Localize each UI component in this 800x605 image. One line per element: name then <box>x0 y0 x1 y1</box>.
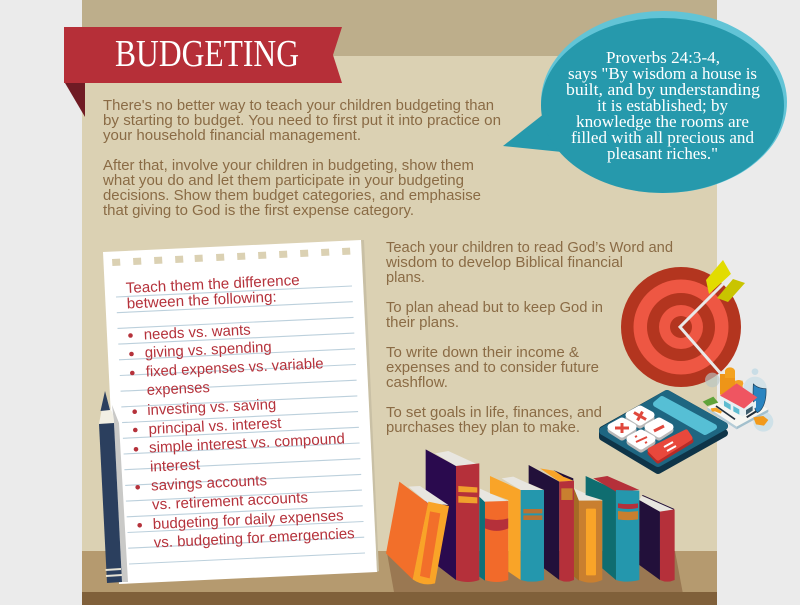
title ribbon <box>64 27 342 117</box>
right column text: To set goals in life, finances, and <box>386 405 602 421</box>
list text: between the following: <box>126 289 277 312</box>
list text: expenses <box>146 379 210 399</box>
right column text: purchases they plan to make. <box>386 420 580 436</box>
shelf shadow <box>387 551 683 592</box>
intro text: After that, involve your children in budgeting, show them <box>103 158 474 174</box>
quote text: built, and by understanding <box>566 80 760 99</box>
quote text: knowledge the rooms are <box>576 112 749 131</box>
notepaper <box>103 240 379 584</box>
quote text: Proverbs 24:3-4, <box>606 48 720 67</box>
icon: target with arrow <box>621 260 745 387</box>
list text: principal vs. interest <box>148 415 283 438</box>
right column text <box>385 240 673 436</box>
quote text: pleasant riches." <box>607 144 718 163</box>
quote text: filled with all precious and <box>571 128 755 147</box>
list text: Teach them the difference <box>125 272 300 297</box>
list text: budgeting for daily expenses <box>152 507 344 533</box>
book: teal <box>586 476 639 582</box>
display screen <box>656 399 714 432</box>
title: BUDGETING <box>115 33 299 75</box>
paper holes <box>112 248 350 266</box>
intro text: by starting to budget. You need to first put it into practice on <box>103 113 501 129</box>
book: purple and red <box>426 449 479 582</box>
list text: investing vs. saving <box>147 396 277 419</box>
list text <box>125 272 355 551</box>
quote text: says "By wisdom a house is <box>568 64 757 83</box>
right column text: plans. <box>386 270 425 286</box>
book: orange leaning <box>386 482 449 584</box>
list text: needs vs. wants <box>143 322 251 343</box>
intro text: your household financial management. <box>103 128 361 144</box>
list bullets <box>128 333 142 528</box>
right column text: wisdom to develop Biblical financial <box>385 255 623 271</box>
ruled lines <box>116 286 365 564</box>
list text: vs. retirement accounts <box>152 489 308 513</box>
right column text: expenses and to consider future <box>386 360 599 376</box>
books <box>386 449 683 592</box>
book: small dark and red <box>639 495 675 582</box>
right column text: Teach your children to read God’s Word and <box>386 240 673 256</box>
intro text <box>102 98 501 219</box>
list text: interest <box>150 456 201 475</box>
speech bubble: Proverbs quote <box>503 11 787 193</box>
right column text: To plan ahead but to keep God in <box>386 300 603 316</box>
intro text: what you do and let them participate in your budgeting <box>102 173 464 189</box>
book: yellow and teal <box>490 476 544 582</box>
list text: savings accounts <box>151 472 267 494</box>
shelf <box>82 551 717 605</box>
keys <box>611 408 691 461</box>
pencil <box>99 391 128 583</box>
list text: simple interest vs. compound <box>149 430 345 456</box>
list text: fixed expenses vs. variable <box>145 355 324 380</box>
intro text: There's no better way to teach your children budgeting than <box>103 98 494 114</box>
book: orange with teal cover <box>479 489 508 582</box>
intro text: decisions. Show them budget categories, and emphasise <box>103 188 481 204</box>
book: dark and red <box>529 465 574 582</box>
quote text <box>566 48 760 163</box>
icon: house finance <box>703 367 773 432</box>
icon: calculator <box>603 394 724 470</box>
intro text: that giving to God is the first expense category. <box>103 203 414 219</box>
list text: giving vs. spending <box>144 339 272 361</box>
panel: background <box>82 0 717 605</box>
book: brown <box>574 488 602 583</box>
right column text: their plans. <box>386 315 459 331</box>
list text: vs. budgeting for emergencies <box>153 525 355 551</box>
quote text: it is established; by <box>597 96 729 115</box>
right column text: To write down their income & <box>386 345 579 361</box>
right column text: cashflow. <box>386 375 448 391</box>
